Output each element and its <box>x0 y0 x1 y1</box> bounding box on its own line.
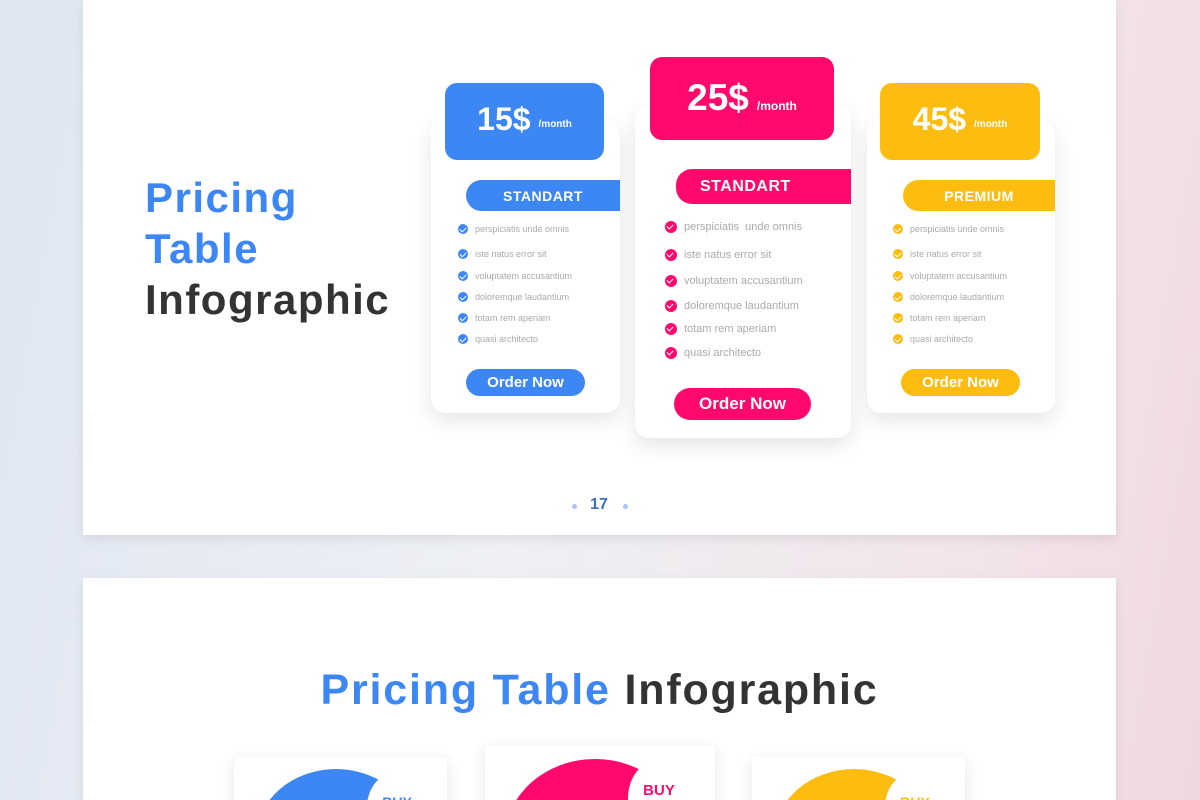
panel: bottom slide <box>83 578 1116 800</box>
features yellow: voluptatem accusantium <box>910 271 1007 281</box>
bottom card yellow <box>752 757 965 800</box>
features pink: perspiciatis unde omnis <box>684 221 802 233</box>
features pink: totam rem aperiam <box>684 323 776 335</box>
features pink <box>665 221 803 359</box>
dots <box>572 504 628 509</box>
price header yellow: /month <box>974 119 1007 130</box>
features blue: doloremque laudantium <box>475 292 569 302</box>
ribbon blue <box>466 180 620 211</box>
ribbon pink <box>676 169 851 204</box>
panel: top slide <box>83 0 1116 535</box>
features pink: iste natus error sit <box>684 249 771 261</box>
features pink: voluptatem accusantium <box>684 275 803 287</box>
price header blue: /month <box>539 119 572 130</box>
features pink: quasi architecto <box>684 347 761 359</box>
button yellow <box>901 369 1020 396</box>
price header blue: 15$ <box>477 101 531 137</box>
features blue <box>458 224 572 344</box>
ribbon pink: STANDART <box>700 178 791 194</box>
features yellow: quasi architecto <box>910 334 973 344</box>
price header pink: 25$ <box>687 77 749 118</box>
price header pink <box>650 57 834 140</box>
features blue: quasi architecto <box>475 334 538 344</box>
price header blue <box>445 83 604 160</box>
button yellow: Order Now <box>922 374 999 391</box>
bottom title: Pricing Table Infographic <box>321 666 878 714</box>
price header yellow: 45$ <box>913 101 966 137</box>
button blue: Order Now <box>487 374 564 391</box>
features yellow: totam rem aperiam <box>910 313 986 323</box>
features blue: iste natus error sit <box>475 249 547 259</box>
page number: 17 <box>590 496 608 513</box>
title: Table <box>145 225 259 272</box>
bottom card pink: BUY <box>643 782 675 799</box>
features yellow: perspiciatis unde omnis <box>910 224 1004 234</box>
features yellow: iste natus error sit <box>910 249 982 259</box>
price header yellow <box>880 83 1040 160</box>
button pink <box>674 388 811 420</box>
card: pink <box>635 105 851 438</box>
ribbon yellow <box>903 180 1055 211</box>
features blue: perspiciatis unde omnis <box>475 224 569 234</box>
price header pink: /month <box>757 99 797 113</box>
ribbon yellow: PREMIUM <box>944 188 1014 204</box>
features yellow: doloremque laudantium <box>910 292 1004 302</box>
features blue: voluptatem accusantium <box>475 271 572 281</box>
title: Pricing <box>145 174 298 221</box>
title: Infographic <box>145 276 390 323</box>
features pink: doloremque laudantium <box>684 300 799 312</box>
features blue: totam rem aperiam <box>475 313 551 323</box>
card: yellow <box>867 120 1055 413</box>
ribbon blue: STANDART <box>503 188 583 204</box>
bottom card blue <box>234 757 447 800</box>
button blue <box>466 369 585 396</box>
bottom card pink <box>485 746 715 800</box>
title <box>145 174 390 323</box>
card: blue <box>431 120 620 413</box>
features yellow <box>893 224 1007 344</box>
button pink: Order Now <box>699 394 786 413</box>
